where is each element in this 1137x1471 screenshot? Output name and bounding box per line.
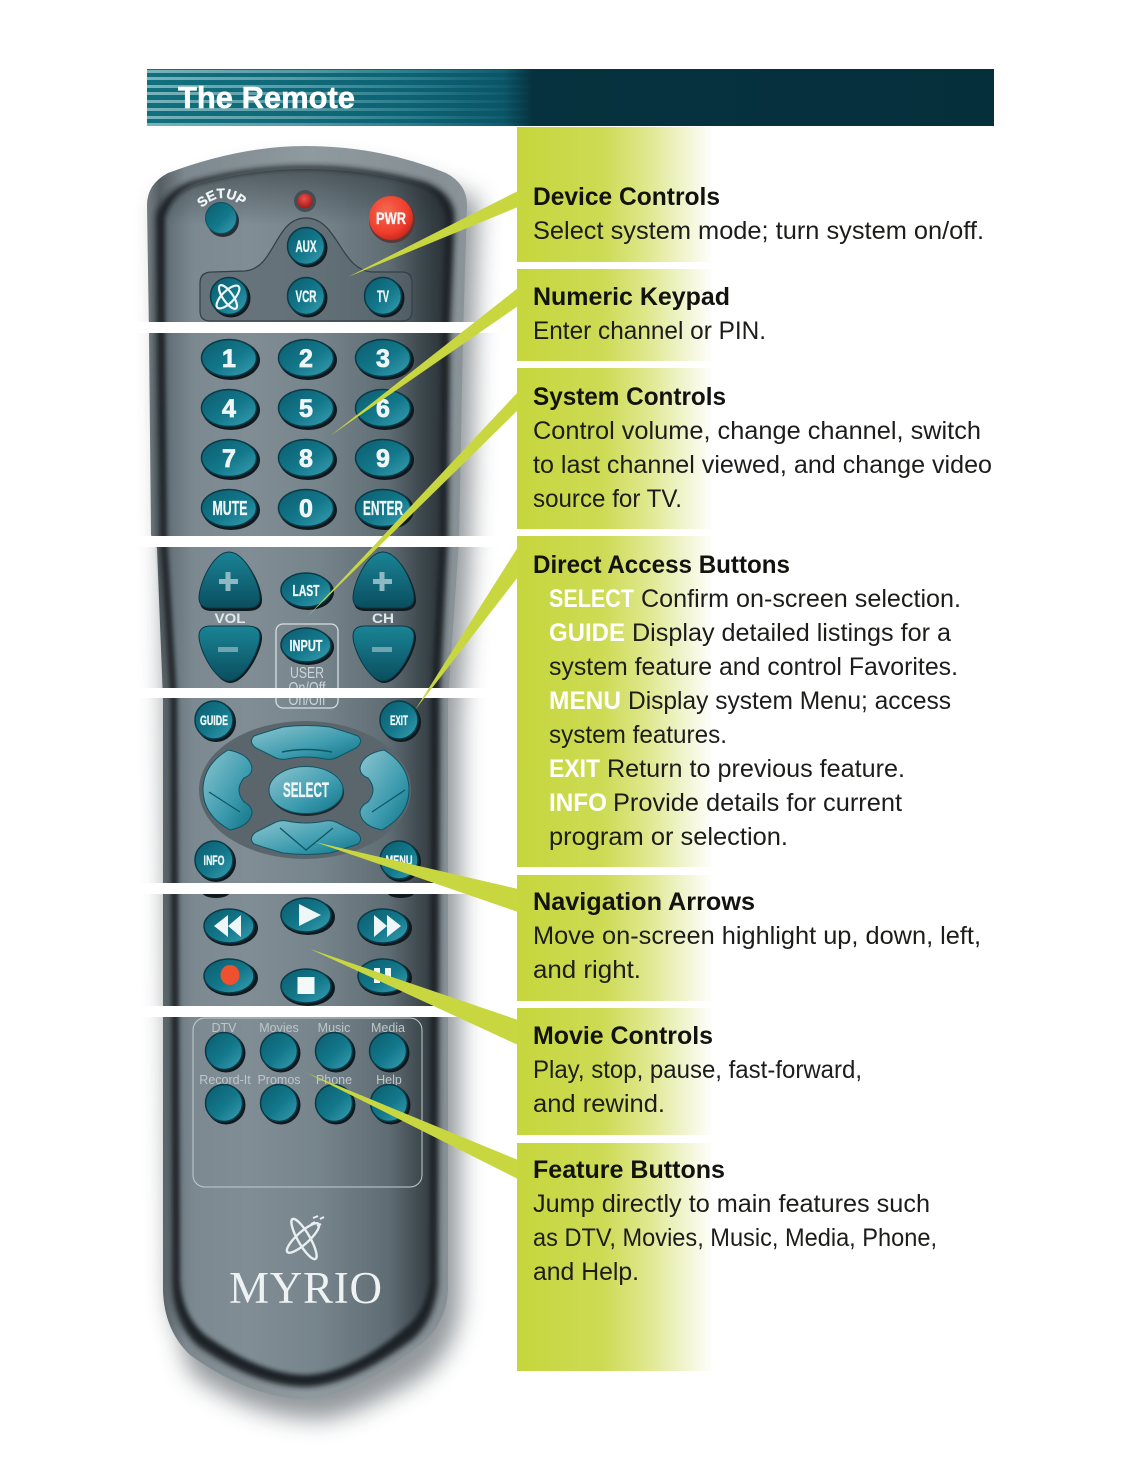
- text: numeric keypad: [533, 283, 766, 345]
- pointer arrows: [306, 191, 518, 1179]
- text: numeric keypad: Numeric Keypad: [533, 283, 730, 311]
- key 9: 9: [376, 445, 390, 473]
- mute key: [202, 490, 260, 530]
- key 0: 0: [299, 495, 313, 523]
- text: movie controls: [533, 1022, 862, 1118]
- key 8: [278, 440, 337, 480]
- exit button: [380, 701, 421, 742]
- text: navigation arrows: [533, 888, 981, 984]
- key 2: [278, 340, 337, 380]
- Media button: [370, 1021, 410, 1072]
- remote body rim: [147, 146, 467, 1399]
- menu button: [380, 841, 421, 882]
- pause: [358, 959, 412, 996]
- Record-It button: Record-It: [199, 1073, 251, 1087]
- text: feature buttons: [533, 1156, 937, 1286]
- DTV button: [206, 1021, 246, 1072]
- title text: The Remote: [178, 80, 355, 115]
- CH label: CH: [372, 610, 394, 626]
- info button: [195, 841, 236, 882]
- text: direct access buttons: SELECT: [549, 585, 634, 613]
- text: direct access buttons: Direct Access Buttons: [533, 551, 790, 579]
- DTV button: DTV: [212, 1021, 237, 1035]
- section: system controls buttons: [199, 552, 416, 709]
- text: system controls: Control volume, change channel, switch: [533, 417, 981, 445]
- text: navigation arrows: and right.: [533, 956, 641, 984]
- panel: green callout column: [517, 127, 714, 1371]
- navigation ring: [199, 721, 411, 859]
- key 7: [202, 440, 260, 480]
- text: system controls: to last channel viewed, and change video: [533, 451, 992, 479]
- key 1: [202, 340, 260, 380]
- arrow: device controls: [348, 191, 518, 277]
- text: direct access buttons: [533, 551, 961, 851]
- remote shadow: [160, 165, 478, 1419]
- text: direct access buttons: MENU: [549, 687, 621, 715]
- arrow: system controls: [306, 392, 518, 618]
- aux button: AUX: [296, 237, 317, 256]
- key 4: 4: [222, 395, 236, 423]
- last button: [281, 573, 334, 610]
- text: direct access buttons: GUIDE: [549, 619, 625, 647]
- remote face: [165, 169, 446, 1375]
- key 2: 2: [299, 345, 313, 373]
- tv button: [364, 278, 404, 318]
- icon: atom logo: [283, 1216, 324, 1262]
- arrow: feature buttons: [307, 1073, 518, 1179]
- text: system controls: System Controls: [533, 383, 726, 411]
- guide button: [195, 701, 236, 742]
- text: device controls: Device Controls: [533, 183, 720, 211]
- text: direct access buttons: Return to previous feature.: [607, 755, 905, 783]
- atom button: [210, 278, 250, 318]
- arrow: numeric keypad: [330, 288, 518, 436]
- text: direct access buttons: program or selection.: [549, 823, 788, 851]
- power button: PWR: [376, 209, 406, 228]
- text: direct access buttons: Display system Menu; access: [628, 687, 951, 715]
- channel down: [353, 626, 416, 683]
- Help button: Help: [376, 1073, 402, 1087]
- text: direct access buttons: Display detailed listings for a: [632, 619, 951, 647]
- volume up: [199, 552, 262, 611]
- text: navigation arrows: Navigation Arrows: [533, 888, 755, 916]
- input group box: [276, 624, 338, 709]
- stop: [281, 969, 335, 1006]
- key 6: 6: [376, 395, 390, 423]
- key 3: [356, 340, 414, 380]
- tab outline: [200, 218, 412, 321]
- Promos button: Promos: [257, 1073, 301, 1087]
- mute key: MUTE: [212, 498, 248, 520]
- text: direct access buttons: system features.: [549, 721, 727, 749]
- text: numeric keypad: Enter channel or PIN.: [533, 317, 766, 345]
- enter key: ENTER: [363, 498, 403, 520]
- text: system controls: source for TV.: [533, 485, 682, 513]
- enter key: [356, 490, 414, 530]
- arrow: navigation: [315, 842, 518, 912]
- key 3: 3: [376, 345, 390, 373]
- text: direct access buttons: EXIT: [549, 755, 600, 783]
- Music button: Music: [318, 1021, 350, 1035]
- text: feature buttons: and Help.: [533, 1258, 639, 1286]
- exit button: EXIT: [390, 712, 408, 728]
- up arrow: [251, 726, 361, 759]
- vcr button: VCR: [296, 287, 316, 306]
- tv button: TV: [377, 287, 389, 306]
- right arrow: [360, 750, 409, 830]
- arrow: direct access: [415, 547, 518, 710]
- section: device controls buttons: [197, 188, 415, 322]
- input group box: INPUT: [290, 638, 323, 655]
- text: feature buttons: as DTV, Movies, Music, Media, Phone,: [533, 1224, 937, 1252]
- text: direct access buttons: INFO: [549, 789, 607, 817]
- left arrow: [203, 750, 252, 830]
- Promos button: [257, 1073, 301, 1124]
- text: feature buttons: Jump directly to main features such: [533, 1190, 930, 1218]
- vcr button: [288, 278, 328, 318]
- aux button: [288, 228, 328, 268]
- Record-It button: [199, 1073, 251, 1124]
- Help button: [370, 1073, 410, 1124]
- VOL label: VOL: [214, 610, 246, 626]
- fast forward: [358, 909, 412, 946]
- volume down: [199, 626, 262, 683]
- key 8: 8: [299, 445, 313, 473]
- text: system controls: [533, 383, 992, 513]
- text: device controls: [533, 183, 984, 245]
- feature panel: [193, 1018, 422, 1187]
- Phone button: Phone: [316, 1073, 352, 1087]
- down arrow: [251, 821, 361, 854]
- text: movie controls: Movie Controls: [533, 1022, 713, 1050]
- key 9: [356, 440, 414, 480]
- text: navigation arrows: Move on-screen highlight up, down, left,: [533, 922, 981, 950]
- clipped button tops: [202, 886, 415, 898]
- key 5: 5: [299, 395, 313, 423]
- text: movie controls: Play, stop, pause, fast-forward,: [533, 1056, 862, 1084]
- inner dark edge: [156, 166, 455, 1387]
- record: [204, 959, 258, 996]
- guide button: GUIDE: [200, 712, 228, 728]
- select button: [269, 766, 344, 816]
- rewind: [204, 909, 258, 946]
- select button: SELECT: [283, 779, 329, 802]
- Media button: Media: [371, 1021, 405, 1035]
- Myrio logo: [229, 1216, 382, 1313]
- status light: [294, 190, 316, 212]
- key 4: [202, 390, 260, 430]
- text: direct access buttons: Provide details for current: [613, 789, 902, 817]
- arrow: movie controls: [310, 949, 518, 1045]
- Music button: [316, 1021, 356, 1072]
- Movies button: Movies: [259, 1021, 299, 1035]
- face top shading: [165, 169, 446, 225]
- section: feature buttons: [193, 1018, 422, 1187]
- text: direct access buttons: system feature and control Favorites.: [549, 653, 958, 681]
- play: [281, 898, 335, 935]
- key 6: [356, 390, 414, 430]
- input group box: On/Off: [288, 680, 326, 697]
- menu button: MENU: [386, 852, 412, 868]
- key 5: [278, 390, 337, 430]
- title banner: [147, 69, 994, 126]
- Movies button: [259, 1021, 300, 1072]
- setup button: SETUP: [197, 188, 246, 207]
- last button: LAST: [292, 583, 320, 600]
- input group box: On/Off: [288, 692, 326, 709]
- key 7: 7: [222, 445, 236, 473]
- white band cuts across remote: [100, 322, 510, 1017]
- key 0: [278, 490, 337, 530]
- key 1: 1: [222, 345, 236, 373]
- section: movie control buttons: [202, 886, 415, 1006]
- text: direct access buttons: Confirm on-screen selection.: [641, 585, 961, 613]
- power button: [369, 196, 415, 243]
- input group box: USER: [290, 665, 324, 682]
- channel up: [353, 552, 416, 611]
- Phone button: [316, 1073, 356, 1124]
- wordmark: MYRIO: [229, 1263, 382, 1313]
- text: feature buttons: Feature Buttons: [533, 1156, 725, 1184]
- info button: INFO: [204, 852, 225, 868]
- text: movie controls: and rewind.: [533, 1090, 665, 1118]
- section: numeric keypad buttons: [202, 340, 414, 530]
- section: direct access and navigation buttons: [195, 701, 421, 882]
- remote control: [144, 146, 494, 1434]
- setup button: [197, 188, 246, 237]
- text: device controls: Select system mode; turn system on/off.: [533, 217, 984, 245]
